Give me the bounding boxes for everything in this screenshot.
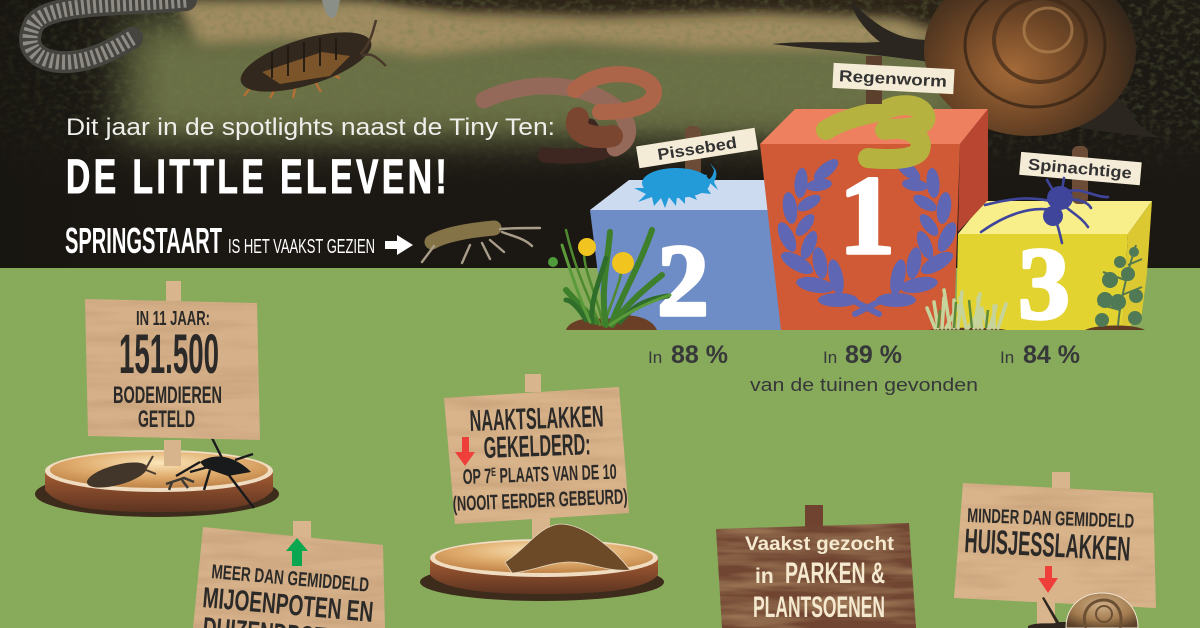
- board text: [201, 561, 375, 628]
- board text: 151.500: [119, 322, 219, 385]
- sign group: huisjesslakken: [954, 472, 1156, 628]
- board text: (NOOIT EERDER GEBEURD): [452, 485, 628, 516]
- post: [1037, 472, 1070, 628]
- dish: [420, 539, 664, 601]
- plant: grass: [927, 290, 1006, 330]
- illustration: insect leg at top: [322, 0, 340, 18]
- illustration: woodlouse: [234, 20, 386, 104]
- springstaart line: SPRINGSTAART: [65, 220, 222, 261]
- post: [293, 521, 311, 538]
- board text: MEER DAN GEMIDDELD: [211, 561, 370, 597]
- title: DE LITTLE ELEVEN!: [66, 149, 450, 203]
- stat: 88 percent: In: [648, 348, 662, 367]
- board text: E: [491, 465, 496, 479]
- podium: [590, 109, 1152, 341]
- board text: BODEMDIEREN: [113, 382, 222, 409]
- post: [805, 505, 823, 527]
- dish with animals: [35, 438, 279, 517]
- illustration: millipede: [30, 0, 186, 62]
- intro line: Dit jaar in de spotlights naast de Tiny Ten:: [66, 114, 555, 141]
- slug: [505, 524, 630, 573]
- silhouette: spider: [981, 178, 1108, 243]
- board text: IN 11 JAAR:: [136, 308, 210, 330]
- post: [166, 281, 181, 301]
- illustration: earthworm: [484, 74, 654, 156]
- board text: [964, 505, 1134, 569]
- wood board: [444, 387, 629, 524]
- label: Spinachtige: [1019, 146, 1142, 204]
- block 1: [760, 109, 988, 330]
- board text: PARKEN &: [785, 557, 885, 590]
- label: Spinachtige: Spinachtige: [1027, 156, 1133, 183]
- arrow: red down: [455, 437, 475, 466]
- board text: OP 7: [462, 464, 511, 489]
- board text: PLANTSOENEN: [753, 591, 885, 624]
- board text: NAAKTSLAKKEN: [469, 400, 604, 438]
- sign group: naaktslakken: [420, 374, 664, 601]
- laurel wreath: [774, 155, 960, 314]
- block 1: 1: [839, 154, 895, 278]
- green lower background: [0, 268, 1200, 628]
- wood board: [716, 523, 916, 628]
- stat: 89 percent: In: [823, 348, 837, 367]
- stat: 84 percent: In: [1000, 348, 1014, 367]
- board text: GETELD: [138, 406, 195, 433]
- label: Regenworm: Regenworm: [839, 68, 947, 91]
- board text: GEKELDERD:: [483, 428, 591, 465]
- wood board: [85, 299, 260, 440]
- block 2: [590, 180, 781, 338]
- illustration: springtail: [422, 228, 540, 263]
- board text: PLAATS VAN DE 10: [496, 461, 617, 488]
- block 3: [956, 201, 1152, 341]
- board text: in: [755, 565, 774, 588]
- sign group: parken en plantsoenen: [716, 505, 916, 628]
- label: Pissebed: Pissebed: [656, 135, 738, 164]
- stat: 88 percent: 88 %: [671, 341, 728, 369]
- plant: dandelion: [548, 230, 670, 330]
- stat: 89 percent: 89 %: [845, 341, 902, 369]
- post: [525, 374, 550, 540]
- block 3: 3: [1018, 227, 1070, 341]
- arrow: red down: [1038, 566, 1058, 593]
- wood board: [193, 527, 385, 628]
- plant: parsley: [1085, 245, 1145, 330]
- background: ground photo: [0, 0, 1200, 268]
- silhouette: pissebed: [634, 163, 718, 208]
- snail: [1028, 593, 1138, 628]
- illustration: large snail: [772, 0, 1162, 138]
- stat: 84 percent: 84 %: [1023, 341, 1080, 369]
- label: Regenworm: [832, 56, 955, 104]
- arrow: green up: [286, 538, 308, 566]
- springstaart line: IS HET VAAKST GEZIEN: [228, 236, 375, 258]
- board text: [452, 400, 628, 516]
- sign group: miljoenpoten: [193, 521, 385, 628]
- arrow: white: [385, 235, 413, 255]
- board text: [113, 308, 222, 433]
- block 2: 2: [657, 224, 709, 338]
- stat caption: van de tuinen gevonden: [750, 375, 978, 395]
- sign group: 151.500 bodemdieren: [35, 281, 279, 517]
- label: Pissebed: [636, 126, 758, 176]
- board text: Vaakst gezocht: [745, 534, 895, 555]
- silhouette: earthworm: [826, 105, 925, 159]
- wood board: [954, 483, 1156, 608]
- board text: [745, 534, 895, 624]
